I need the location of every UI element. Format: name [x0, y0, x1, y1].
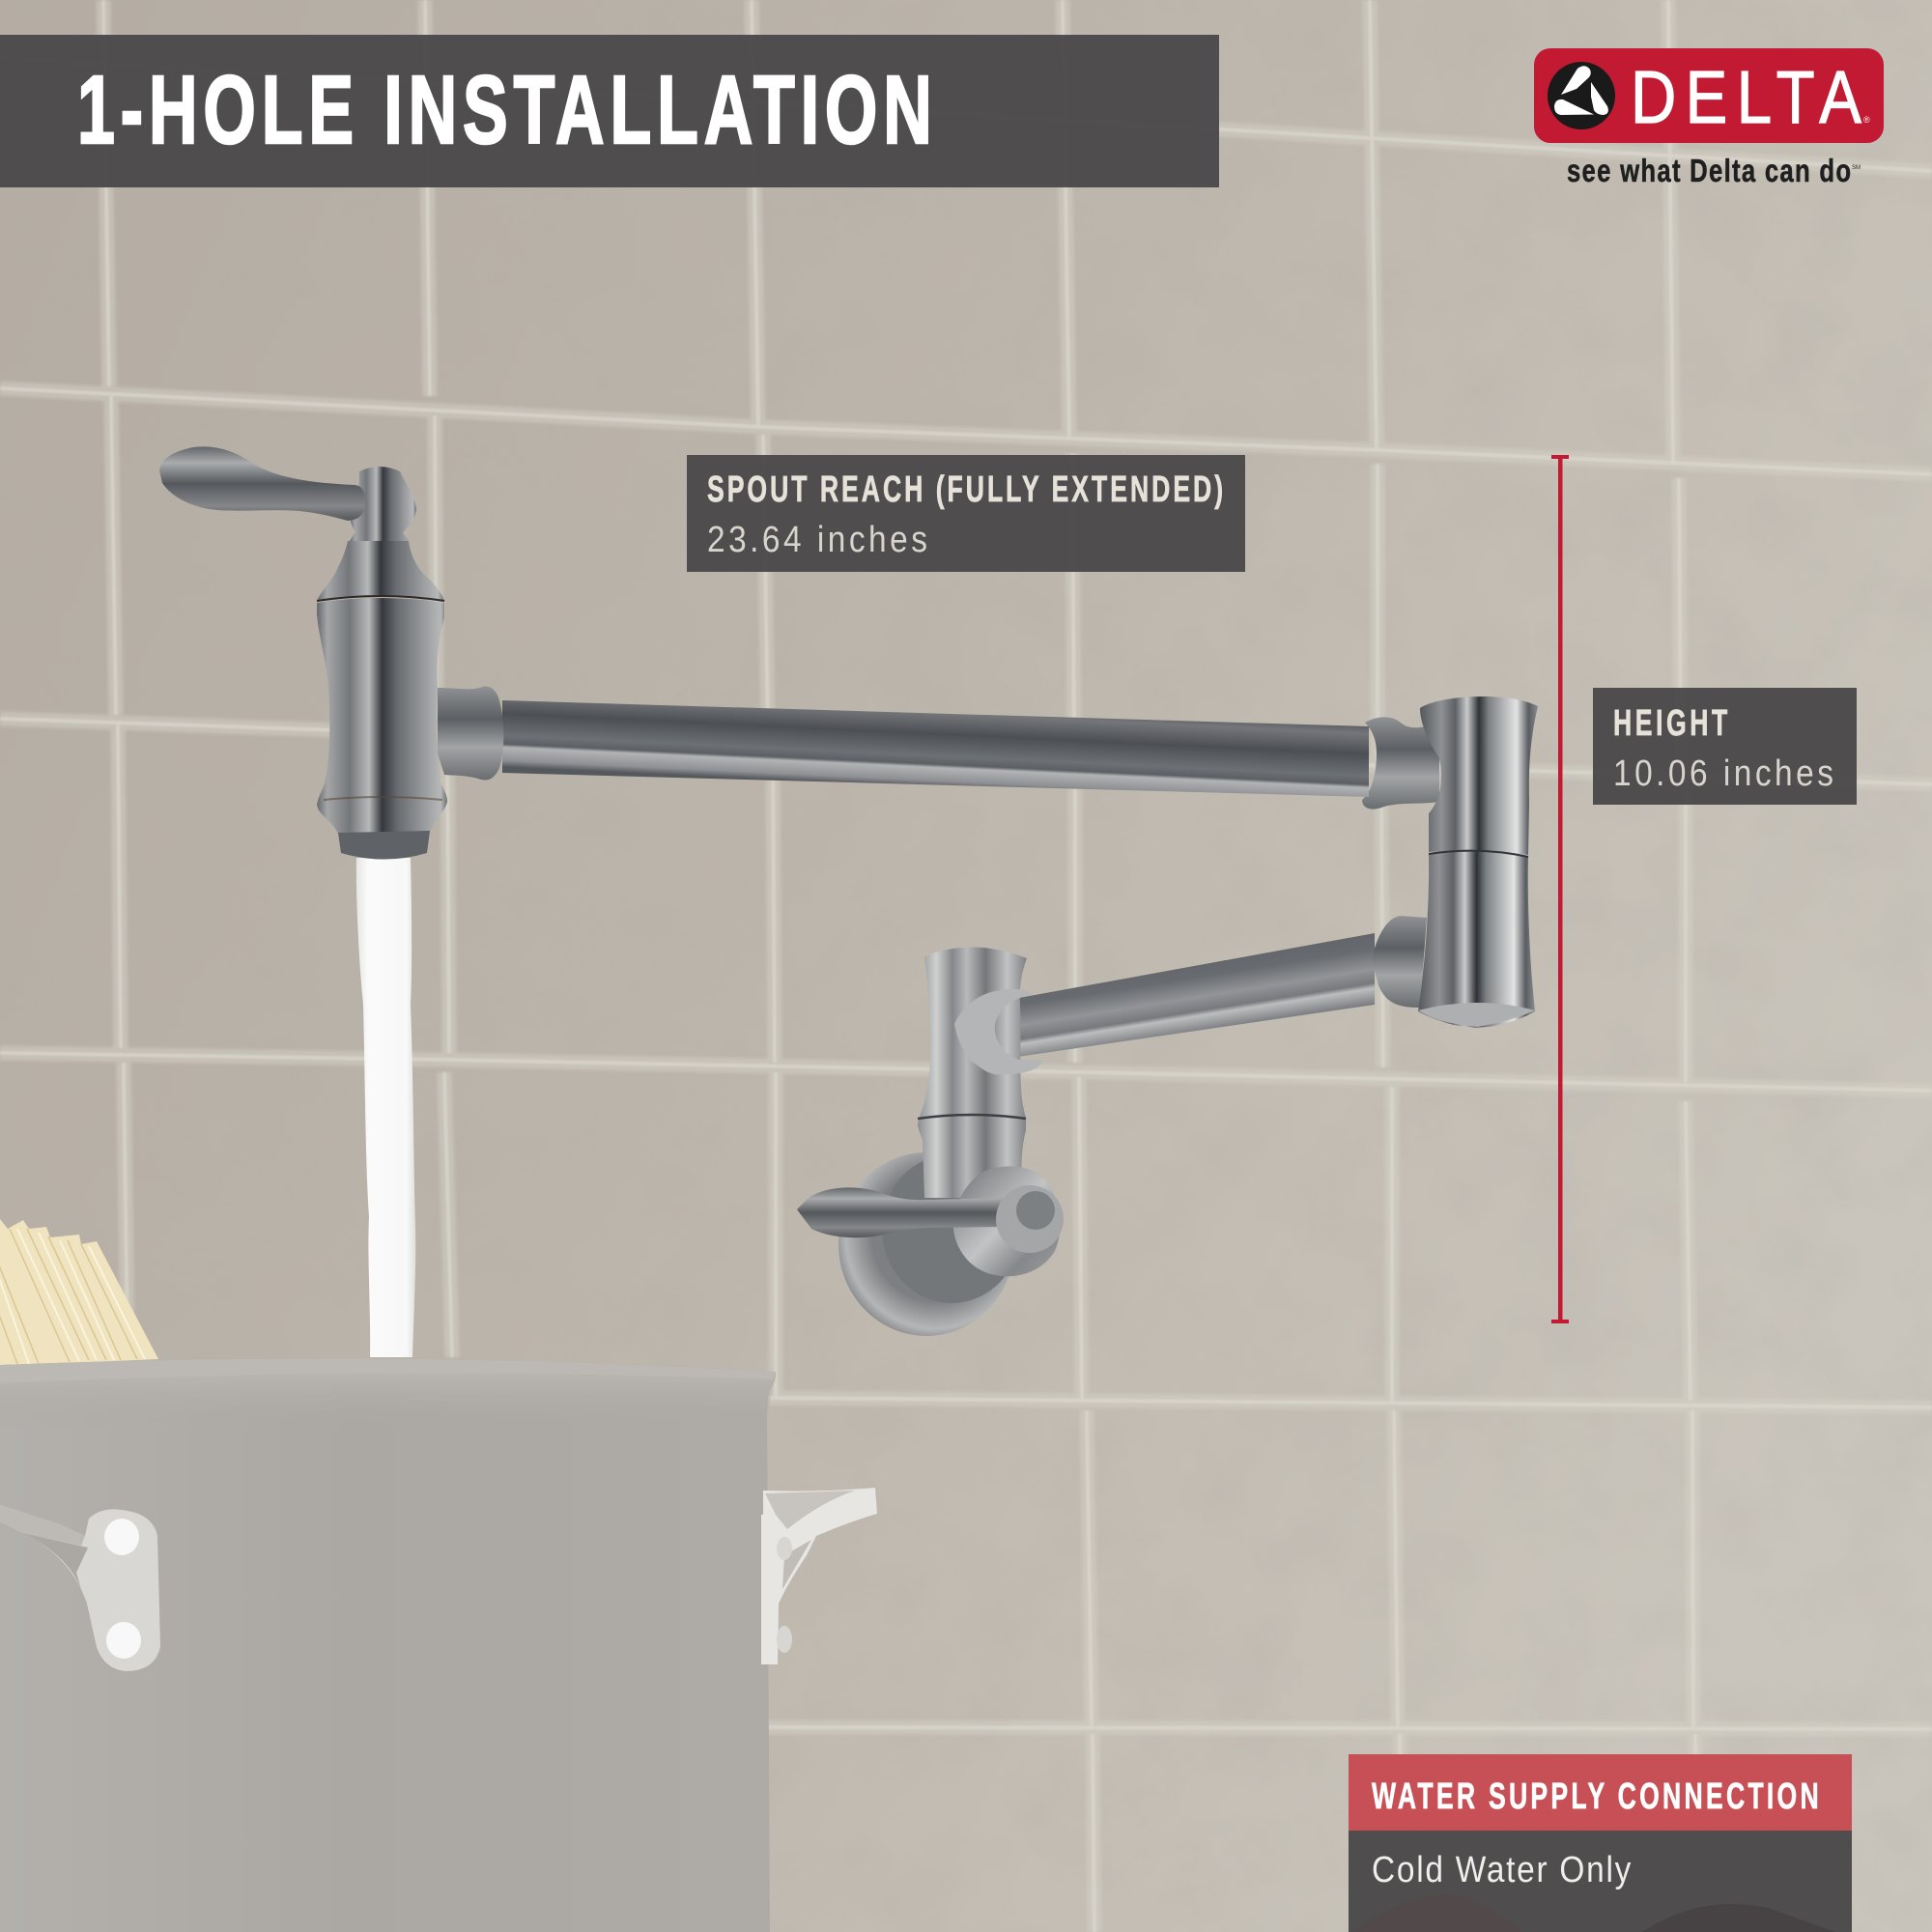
water supply connection panel: Cold Water Only — [1372, 1849, 1632, 1889]
water supply connection panel — [1349, 1754, 1852, 1932]
pot right handle — [761, 1488, 877, 1664]
lower arm right collar — [1372, 916, 1427, 1008]
spaghetti — [0, 1219, 158, 1366]
lower knob — [996, 1185, 1064, 1253]
Delta logo: DELTA — [1631, 56, 1861, 139]
spout reach callout: SPOUT REACH (FULLY EXTENDED) — [707, 468, 1223, 509]
left elbow connector — [438, 686, 503, 781]
spout reach callout — [687, 455, 1245, 572]
right upper cylinder — [1420, 696, 1538, 855]
lower arm tube — [998, 933, 1375, 1060]
title text: 1-HOLE INSTALLATION — [77, 57, 932, 164]
left valve body — [317, 598, 447, 834]
height callout: HEIGHT — [1613, 701, 1727, 743]
lower vertical body — [918, 947, 1027, 1198]
Delta logo: SM — [1852, 165, 1861, 171]
panel heading — [1349, 1754, 1852, 1831]
lower lever — [797, 1187, 1005, 1237]
valve shoulder — [317, 541, 444, 601]
height dimension line — [1551, 455, 1569, 1323]
Delta logo: see what Delta can do — [1567, 154, 1851, 189]
Delta logo — [1534, 48, 1884, 189]
pot left handle — [0, 1505, 160, 1671]
lower arm left collar — [954, 989, 1043, 1075]
valve cap — [350, 467, 416, 541]
title banner — [0, 35, 1219, 187]
right elbow — [1362, 717, 1439, 810]
faucet — [159, 446, 1538, 1336]
main long spout tube — [502, 700, 1369, 797]
pot — [0, 1358, 877, 1932]
wall flange — [838, 1152, 1021, 1336]
aerator — [338, 831, 430, 860]
height callout: 10.06 inches — [1613, 753, 1833, 793]
upper lever handle — [159, 446, 365, 521]
height callout — [1593, 688, 1857, 805]
right lower cylinder — [1418, 851, 1535, 1028]
spout reach callout: 23.64 inches — [707, 519, 927, 559]
lower valve cone — [953, 1166, 1061, 1276]
panel heading: WATER SUPPLY CONNECTION — [1372, 1775, 1819, 1816]
water stream — [356, 858, 415, 1357]
Delta logo: ® — [1863, 115, 1870, 125]
